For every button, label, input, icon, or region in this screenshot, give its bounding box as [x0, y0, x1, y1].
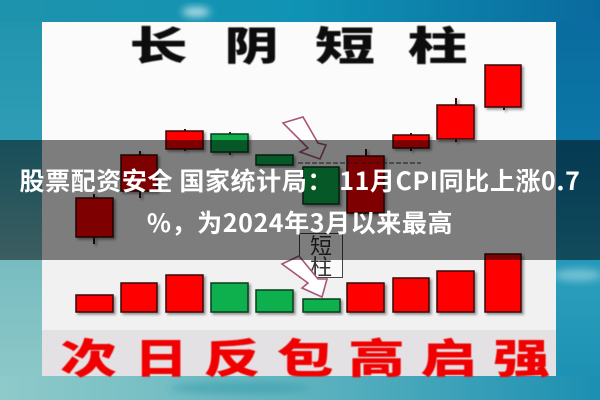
candle 2 — [121, 151, 157, 198]
chart: volume bars — [76, 254, 521, 312]
caption: 次日反包高启强: 高 — [348, 327, 405, 385]
candle 9 — [437, 98, 474, 142]
label box: 短柱 — [300, 229, 342, 282]
arrow: upper pointer — [283, 117, 326, 159]
headline text — [19, 162, 580, 240]
caption: 次日反包高启强: 启 — [420, 327, 477, 385]
candle 3 — [166, 129, 203, 151]
candle 10 — [485, 65, 521, 110]
chart: long bearish short candle sequence — [76, 65, 521, 244]
heading: 长阴短柱: 柱 — [407, 14, 468, 72]
candle 6 — [303, 167, 339, 204]
caption: 次日反包高启强: 反 — [204, 327, 260, 385]
caption: 次日反包高启强 — [60, 326, 550, 385]
heading: 长阴短柱 — [130, 14, 468, 72]
arrow: lower pointer — [282, 256, 327, 297]
label box: 短柱: 柱 — [310, 250, 332, 282]
candle 1 — [76, 194, 113, 244]
headline text: 股票配资安全 国家统计局： 11月CPI同比上涨0.7 — [19, 162, 580, 198]
caption: 次日反包高启强: 次 — [60, 327, 117, 385]
caption: 次日反包高启强: 日 — [134, 326, 188, 385]
panel: white chart card — [42, 22, 556, 376]
heading: 长阴短柱: 阴 — [225, 14, 278, 72]
heading: 长阴短柱: 短 — [315, 14, 375, 72]
candle 4 — [211, 132, 248, 155]
overlay band — [0, 140, 600, 260]
heading: 长阴短柱: 长 — [130, 14, 187, 72]
headline text: %，为2024年3月以来最高 — [147, 204, 453, 240]
candle 5 — [256, 155, 293, 165]
caption: 次日反包高启强: 包 — [277, 327, 333, 385]
candle 7 — [347, 149, 384, 214]
candle 8 — [393, 133, 429, 151]
label box: 短柱: 短 — [310, 229, 332, 261]
caption: 次日反包高启强: 强 — [493, 327, 550, 385]
